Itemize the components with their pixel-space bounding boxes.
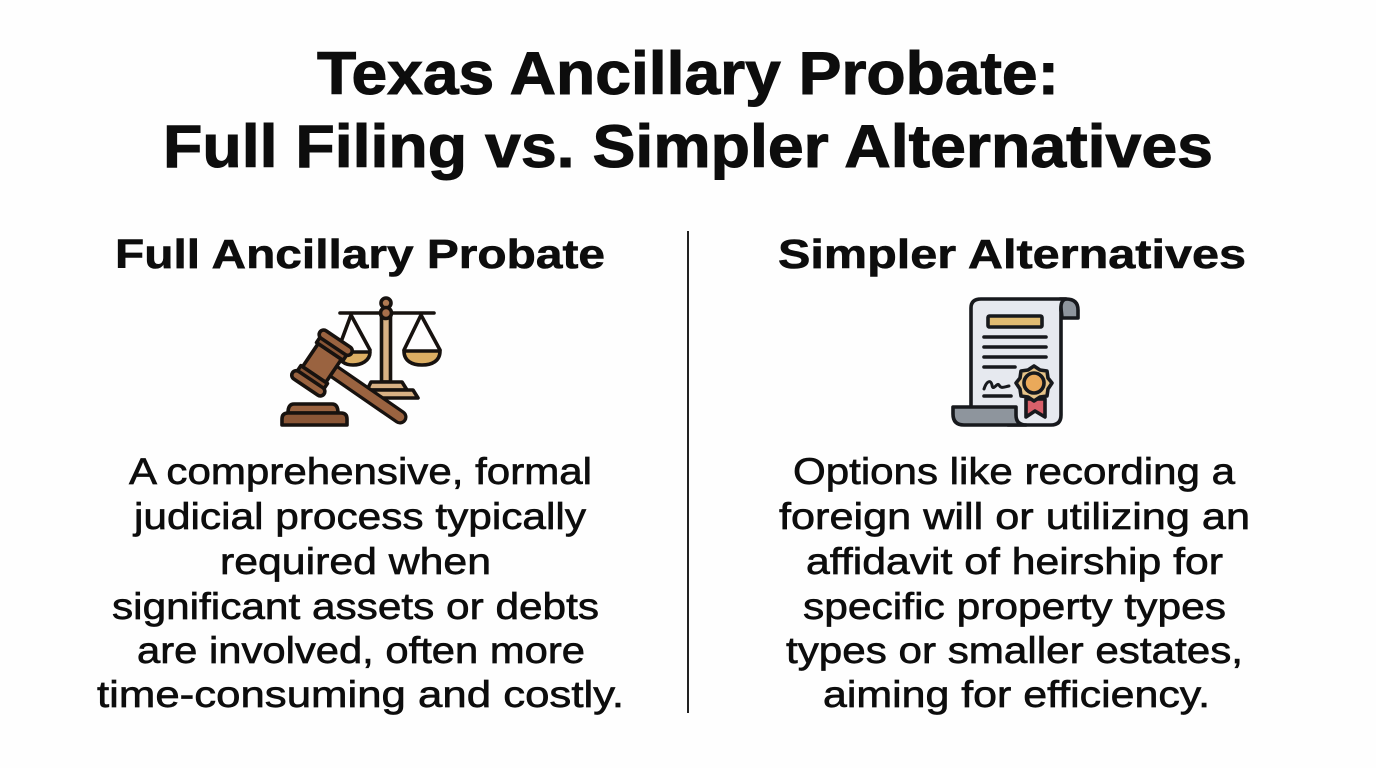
- panel: full ancillary probate: [97, 231, 624, 715]
- body text: simpler alternatives: aiming for efficiency.: [823, 674, 1210, 715]
- panel: simpler alternatives: [778, 231, 1250, 715]
- center divider: [687, 231, 689, 713]
- body text: full ancillary probate: significant assets or debts: [112, 586, 599, 627]
- icon: certificate scroll: [953, 299, 1078, 425]
- body text: full ancillary probate: [97, 451, 624, 715]
- body text: full ancillary probate: are involved, often more: [137, 630, 585, 671]
- icon: gavel and scales: [282, 298, 440, 425]
- body text: full ancillary probate: required when: [220, 541, 491, 582]
- body text: simpler alternatives: affidavit of heirship for: [806, 541, 1223, 582]
- body text: full ancillary probate: time-consuming and costly.: [97, 674, 624, 715]
- title: [163, 40, 1213, 180]
- body text: simpler alternatives: specific property types: [803, 586, 1226, 627]
- body text: simpler alternatives: foreign will or utilizing an: [779, 496, 1250, 537]
- body text: full ancillary probate: A comprehensive, formal: [129, 451, 592, 492]
- body text: simpler alternatives: Options like recording a: [793, 451, 1235, 492]
- heading: full ancillary probate: Full Ancillary Probate: [115, 231, 605, 277]
- title: Full Filing vs. Simpler Alternatives: [163, 113, 1213, 180]
- heading: simpler alternatives: Simpler Alternatives: [778, 231, 1246, 277]
- body text: simpler alternatives: types or smaller estates,: [786, 630, 1243, 671]
- body text: simpler alternatives: [779, 451, 1250, 715]
- body text: full ancillary probate: judicial process typically: [133, 496, 587, 537]
- title: Texas Ancillary Probate:: [317, 40, 1059, 107]
